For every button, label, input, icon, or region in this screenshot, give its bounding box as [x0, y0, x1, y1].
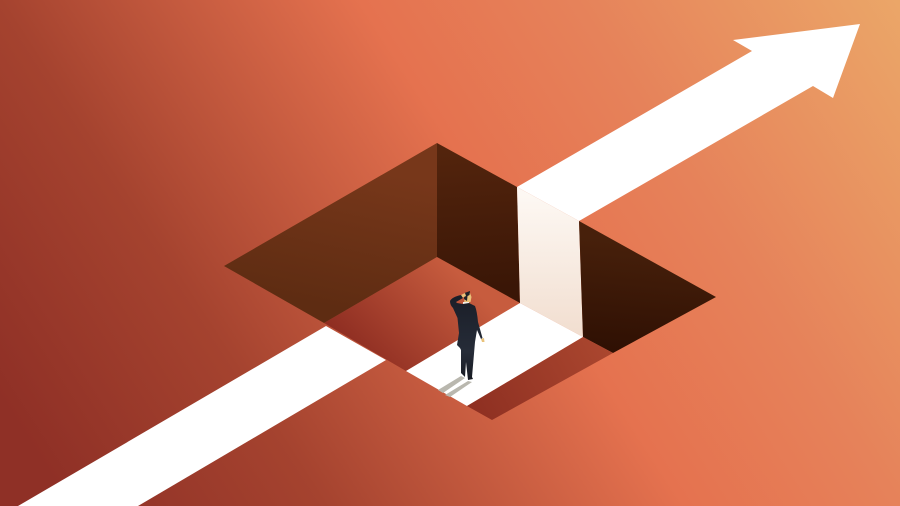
suit — [450, 295, 482, 380]
arrow: upper segment with head — [517, 24, 860, 221]
hair — [464, 291, 470, 301]
raised hand — [461, 293, 466, 298]
hand — [481, 338, 484, 342]
arrow: lower road segment — [18, 326, 386, 506]
head — [464, 293, 472, 303]
pit floor — [324, 257, 520, 371]
pit — [224, 143, 716, 420]
pit left wall — [224, 143, 437, 323]
white arrow falling down the wall — [517, 187, 583, 337]
collar — [463, 302, 469, 304]
white road on pit floor — [406, 303, 583, 406]
pit back wall — [437, 143, 520, 303]
shadow strip on pit floor — [467, 337, 613, 420]
businessman looking up — [438, 291, 484, 397]
cast shadows — [438, 376, 472, 397]
pit right wall — [579, 221, 716, 353]
